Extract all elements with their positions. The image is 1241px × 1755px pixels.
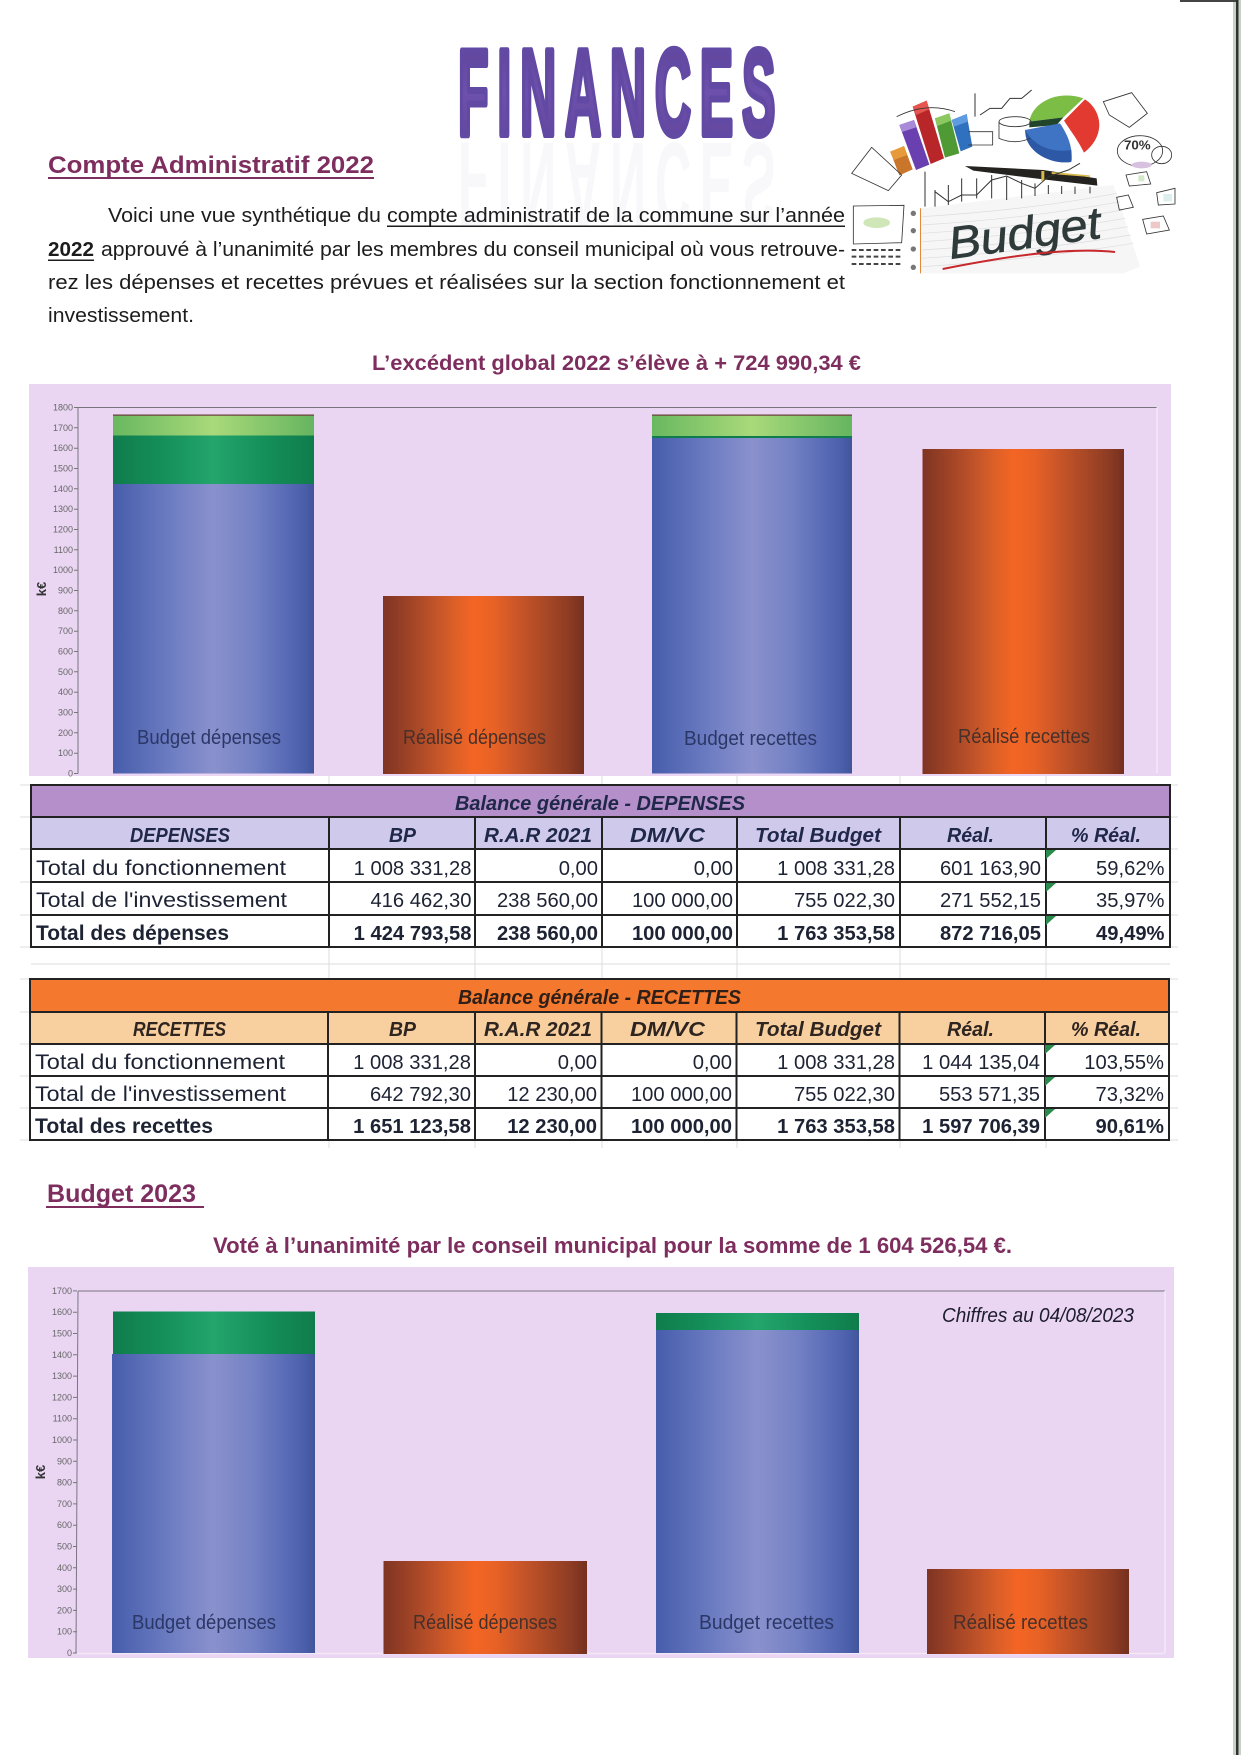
intro paragraph: investissement. (48, 305, 194, 327)
intro paragraph (48, 205, 845, 327)
y axis ticks 2022: 600 (58, 646, 73, 656)
row: investissement: 35,97% (1096, 890, 1165, 912)
column headers (133, 1019, 1141, 1041)
y axis ticks 2022: 300 (58, 708, 73, 718)
row: total des recettes: 100 000,00 (631, 1116, 732, 1138)
y axis ticks 2022: 500 (58, 667, 73, 677)
column headers: Total Budget (755, 1019, 882, 1041)
y axis ticks 2022 (53, 402, 78, 778)
y axis ticks 2022: 1000 (53, 565, 73, 575)
intro paragraph: 2022 (48, 239, 94, 261)
y axis ticks 2022: 0 (68, 768, 73, 778)
row: investissement: 12 230,00 (507, 1084, 597, 1106)
y axis ticks 2023: 1400 (52, 1350, 72, 1360)
row: fonctionnement (35, 1051, 1164, 1074)
row: fonctionnement: 1 008 331,28 (353, 1052, 471, 1074)
headline: vote du budget: Voté à l’unanimité par le conseil municipal pour la somme de 1 604 526,54 €. (213, 1233, 1012, 1258)
y axis ticks 2022: 200 (58, 728, 73, 738)
bar: Budget recettes (656, 1313, 859, 1653)
row: total des dépenses: 1 763 353,58 (777, 923, 895, 945)
y axis ticks 2023: 200 (57, 1605, 72, 1615)
bar: Budget recettes (652, 414, 852, 774)
row: investissement: Total de l'investissement (36, 889, 287, 912)
spreadsheet gridlines (20, 776, 1178, 1148)
panel: chart 2022 (29, 384, 1171, 778)
y axis ticks 2023: 1300 (52, 1371, 72, 1381)
row: investissement: 271 552,15 (940, 890, 1041, 912)
row: total des recettes (35, 1115, 1164, 1138)
table title: Balance générale - RECETTES (458, 987, 742, 1009)
bar: Réalisé recettes: Réalisé recettes (958, 726, 1090, 748)
row: total des dépenses: 100 000,00 (632, 923, 733, 945)
column headers: Réal. (947, 1019, 994, 1041)
row: fonctionnement: 103,55% (1084, 1052, 1164, 1074)
row: fonctionnement: 1 008 331,28 (354, 858, 472, 880)
icon: budget illustration: 70% (1124, 137, 1151, 152)
y axis ticks 2022: 1400 (53, 484, 73, 494)
column headers: BP (389, 825, 417, 847)
row: total des recettes: 1 597 706,39 (922, 1116, 1040, 1138)
y axis ticks 2022: 1800 (53, 402, 73, 412)
row: investissement: 755 022,30 (794, 1084, 895, 1106)
row: investissement: 73,32% (1096, 1084, 1164, 1106)
y axis ticks 2022: 400 (58, 687, 73, 697)
row: fonctionnement: 0,00 (693, 1052, 732, 1074)
scanned page edge (1180, 0, 1241, 1755)
y axis ticks 2022: 1500 (53, 464, 73, 474)
y axis ticks 2023: 1500 (52, 1328, 72, 1338)
row: total des dépenses: 1 424 793,58 (354, 923, 472, 945)
table: balance générale recettes (30, 979, 1169, 1140)
bar: Budget recettes: Budget recettes (699, 1612, 834, 1634)
bar: Réalisé recettes (922, 449, 1124, 774)
y axis ticks 2022: 800 (58, 606, 73, 616)
y axis ticks 2023: 400 (57, 1563, 72, 1573)
table title: Balance générale - DEPENSES (455, 793, 746, 815)
table: balance générale dépenses (31, 785, 1170, 947)
intro paragraph: approuvé à l’unanimité par les membres du conseil municipal où vous retrouve- (101, 239, 845, 261)
row: investissement (35, 1083, 1164, 1106)
row: fonctionnement: 0,00 (694, 858, 733, 880)
row: fonctionnement: 601 163,90 (940, 858, 1041, 880)
row: total des dépenses: Total des dépenses (36, 922, 229, 945)
row: fonctionnement: Total du fonctionnement (35, 1051, 285, 1074)
intro paragraph: compte administratif de la commune sur l’année (387, 205, 845, 227)
row: investissement: 416 462,30 (370, 890, 472, 912)
icon: budget illustration (852, 90, 1175, 273)
y axis ticks 2023: 1200 (52, 1392, 72, 1402)
y axis ticks 2022: 900 (58, 586, 73, 596)
column headers: DEPENSES (130, 825, 231, 847)
column headers: R.A.R 2021 (484, 825, 592, 847)
row: total des dépenses: 872 716,05 (940, 923, 1041, 945)
column headers: RECETTES (133, 1019, 227, 1041)
row: total des dépenses: 49,49% (1096, 923, 1165, 945)
row: investissement: 238 560,00 (497, 890, 598, 912)
column headers: DM/VC (630, 1019, 706, 1041)
row: investissement: 100 000,00 (631, 1084, 732, 1106)
row: total des dépenses (36, 922, 1165, 945)
bar: Budget dépenses: Budget dépenses (132, 1612, 276, 1634)
column headers: Réal. (947, 825, 994, 847)
y axis ticks 2022: 1100 (54, 545, 73, 555)
row: total des dépenses: 238 560,00 (497, 923, 598, 945)
y axis ticks 2022: 1700 (53, 423, 73, 433)
row: fonctionnement: 59,62% (1096, 858, 1165, 880)
row: investissement: 100 000,00 (632, 890, 733, 912)
row: fonctionnement: 1 044 135,04 (922, 1052, 1040, 1074)
bar: Réalisé dépenses (384, 1561, 587, 1654)
y axis ticks 2023: 700 (57, 1499, 72, 1509)
y axis ticks 2022: 1300 (53, 504, 73, 514)
axis unit k€: k€ (34, 582, 49, 596)
y axis ticks 2023: 600 (57, 1520, 72, 1530)
bar: Réalisé dépenses: Réalisé dépenses (413, 1612, 557, 1634)
heading: Budget 2023: Budget 2023 (47, 1180, 196, 1208)
row: total des recettes: 1 651 123,58 (353, 1116, 471, 1138)
column headers: DM/VC (630, 825, 706, 847)
y axis ticks 2023: 1100 (53, 1414, 72, 1424)
row: investissement: 553 571,35 (939, 1084, 1040, 1106)
bar: Budget dépenses (112, 1312, 315, 1653)
row: investissement: 755 022,30 (794, 890, 895, 912)
bar: Budget dépenses: Budget dépenses (137, 727, 281, 749)
y axis ticks 2023: 100 (57, 1627, 72, 1637)
column headers: % Réal. (1071, 825, 1141, 847)
column headers: Total Budget (755, 825, 882, 847)
heading: Compte Administratif 2022: Compte Administratif 2022 (48, 152, 374, 179)
title: FINANCES (458, 25, 784, 161)
bar: Réalisé recettes (927, 1569, 1129, 1654)
headline: excédent global: L’excédent global 2022 s’élève à + 724 990,34 € (372, 351, 861, 375)
row: fonctionnement: Total du fonctionnement (36, 857, 286, 880)
note: date des chiffres: Chiffres au 04/08/2023 (942, 1305, 1134, 1327)
bar: Réalisé recettes: Réalisé recettes (953, 1612, 1088, 1634)
axis unit k€: k€ (33, 1465, 48, 1479)
row: fonctionnement: 1 008 331,28 (777, 1052, 895, 1074)
y axis ticks 2022: 1600 (53, 443, 73, 453)
intro paragraph: rez les dépenses et recettes prévues et réalisées sur la section fonctionnement et (48, 272, 845, 294)
panel: chart 2023 (28, 1267, 1174, 1658)
y axis ticks 2023: 300 (57, 1584, 72, 1594)
y axis ticks 2022: 700 (58, 626, 73, 636)
title: FINANCES (458, 117, 784, 253)
y axis ticks 2023: 900 (57, 1456, 72, 1466)
y axis ticks 2022: 100 (58, 748, 73, 758)
row: fonctionnement (36, 857, 1165, 880)
row: investissement (36, 889, 1165, 912)
icon: budget illustration: Budget (945, 197, 1107, 269)
column headers: % Réal. (1071, 1019, 1141, 1041)
y axis ticks 2023: 500 (57, 1542, 72, 1552)
column headers: BP (389, 1019, 417, 1041)
y axis ticks 2022: 1200 (53, 524, 73, 534)
title (458, 25, 784, 253)
row: total des recettes: Total des recettes (35, 1115, 213, 1138)
bar: Budget recettes: Budget recettes (684, 728, 817, 750)
row: total des recettes: 1 763 353,58 (777, 1116, 895, 1138)
column headers (130, 825, 1141, 847)
intro paragraph: Voici une vue synthétique du (108, 205, 381, 227)
row: total des recettes: 90,61% (1096, 1116, 1164, 1138)
bar: Réalisé dépenses (383, 596, 584, 774)
y axis ticks 2023 (52, 1286, 77, 1658)
row: investissement: Total de l'investissement (35, 1083, 286, 1106)
bar: Réalisé dépenses: Réalisé dépenses (403, 727, 546, 749)
y axis ticks 2023: 800 (57, 1478, 72, 1488)
row: total des recettes: 12 230,00 (507, 1116, 597, 1138)
row: fonctionnement: 0,00 (559, 858, 598, 880)
column headers: R.A.R 2021 (484, 1019, 592, 1041)
row: fonctionnement: 1 008 331,28 (777, 858, 895, 880)
row: investissement: 642 792,30 (370, 1084, 471, 1106)
y axis ticks 2023: 1000 (52, 1435, 72, 1445)
row: fonctionnement: 0,00 (558, 1052, 597, 1074)
y axis ticks 2023: 1700 (52, 1286, 72, 1296)
y axis ticks 2023: 1600 (52, 1307, 72, 1317)
y axis ticks 2023: 0 (67, 1648, 72, 1658)
bar: Budget dépenses (113, 414, 314, 774)
